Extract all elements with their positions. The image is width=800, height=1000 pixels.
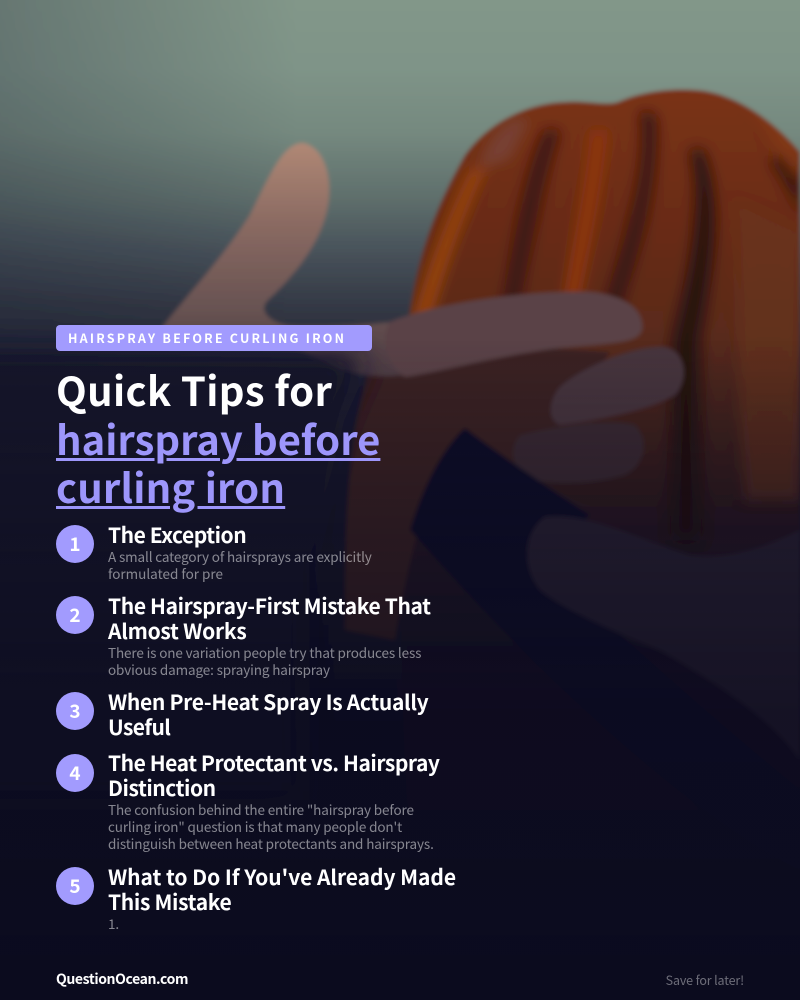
tip 4 bbox=[56, 748, 440, 853]
title: Quick Tips for bbox=[56, 360, 332, 418]
lower thumb bbox=[527, 516, 800, 760]
tip 3: When Pre-Heat Spray Is Actually bbox=[108, 687, 428, 717]
tip 4: curling iron" question is that many people don't bbox=[108, 816, 402, 836]
site name: QuestionOcean.com bbox=[56, 969, 188, 989]
tip 2: There is one variation people try that produces less bbox=[108, 642, 421, 662]
tip 1 bbox=[56, 520, 372, 583]
tip 4: The Heat Protectant vs. Hairspray bbox=[108, 748, 440, 778]
tip 2: 2 bbox=[69, 601, 81, 628]
category tag: HAIRSPRAY BEFORE CURLING IRON bbox=[68, 328, 346, 347]
title: curling iron bbox=[56, 457, 285, 515]
tip 3: Useful bbox=[108, 712, 170, 742]
dimming overlay bbox=[0, 340, 800, 1000]
dark sleeve patch behind title bbox=[0, 352, 365, 800]
tip 4: The confusion behind the entire "hairspray before bbox=[108, 799, 414, 819]
tip 5: This Mistake bbox=[108, 887, 231, 917]
tip 1: A small category of hairsprays are explicitly bbox=[108, 546, 372, 566]
tip 1: 1 bbox=[69, 530, 81, 557]
footer bar bbox=[0, 955, 800, 1000]
category tag bbox=[56, 325, 372, 351]
tip 2: The Hairspray-First Mistake That bbox=[108, 591, 431, 621]
tip 4: 4 bbox=[69, 759, 81, 786]
raised thumb and hand bbox=[150, 143, 420, 376]
red hair bbox=[406, 87, 800, 560]
tip 2: obvious damage: spraying hairspray bbox=[108, 659, 330, 679]
curled hair strand bbox=[345, 348, 610, 640]
title: hairspray before bbox=[56, 408, 380, 466]
tip 3 bbox=[56, 687, 428, 742]
curling iron bbox=[410, 428, 800, 870]
title bbox=[56, 360, 380, 515]
tip 5: 5 bbox=[69, 872, 81, 899]
background photo: hands curling red hair bbox=[0, 0, 800, 754]
tip 5: 1. bbox=[108, 913, 119, 933]
tip 2 bbox=[56, 591, 431, 679]
tip 3: 3 bbox=[69, 697, 81, 724]
tip 5 bbox=[56, 862, 456, 933]
tip 1: formulated for pre bbox=[108, 563, 223, 583]
tip 5: What to Do If You've Already Made bbox=[108, 862, 456, 892]
tip 2: Almost Works bbox=[108, 616, 246, 646]
fingers bbox=[385, 292, 642, 377]
tip 1: The Exception bbox=[108, 520, 246, 550]
tip 4: distinguish between heat protectants and hairsprays. bbox=[108, 833, 434, 853]
save label: Save for later! bbox=[666, 970, 744, 989]
tip 4: Distinction bbox=[108, 773, 216, 803]
